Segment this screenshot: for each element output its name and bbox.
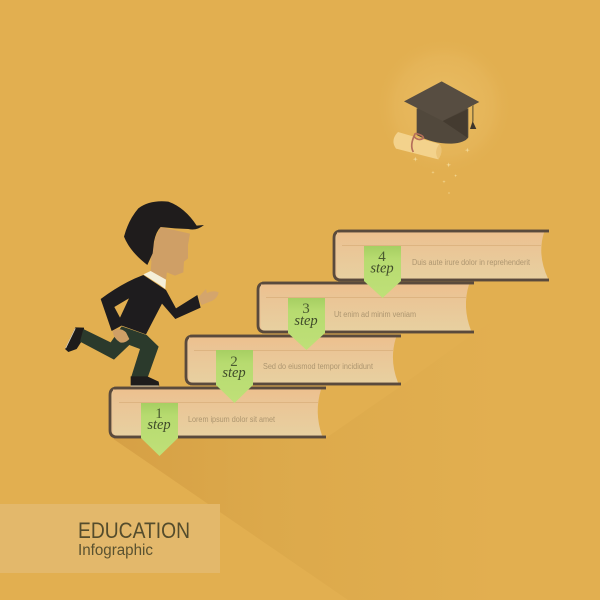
book step 4 <box>334 231 552 280</box>
icon: graduation cap and diploma <box>393 81 479 194</box>
long shadow of the book stairs <box>112 281 600 600</box>
cap body <box>417 108 468 144</box>
back shoe <box>65 327 84 352</box>
book step 2 <box>186 336 403 384</box>
book step 1 <box>110 388 328 437</box>
sparkles <box>413 148 470 194</box>
neck <box>151 258 168 280</box>
ribbon step 2: 2 <box>230 354 238 370</box>
trousers <box>80 326 159 377</box>
ribbon step 3 <box>288 298 325 350</box>
front hand <box>198 289 219 305</box>
ribbon step 2: step <box>222 365 246 381</box>
ribbon step 4: 4 <box>378 249 386 265</box>
diploma <box>393 132 441 159</box>
running student figure <box>65 201 219 386</box>
ribbon step 1: 1 <box>155 406 163 422</box>
hair <box>124 201 204 265</box>
book step 3 <box>258 283 476 332</box>
caption: Duis aute irure dolor in reprehenderit <box>412 258 531 267</box>
ribbon step 4: step <box>370 260 394 276</box>
diploma ribbon <box>412 133 423 152</box>
ribbon step 2 <box>216 350 253 403</box>
tassel <box>472 105 474 122</box>
caption: Lorem ipsum dolor sit amet <box>188 415 276 424</box>
ribbon step 3: 3 <box>302 301 310 317</box>
front shoe <box>131 376 159 386</box>
sweater <box>101 275 201 334</box>
ear <box>147 240 154 251</box>
hand on hip <box>113 329 129 343</box>
face <box>151 227 190 276</box>
ribbon step 1 <box>141 403 178 456</box>
collar <box>143 271 166 289</box>
subtitle: Infographic: Infographic <box>78 542 153 559</box>
caption: Ut enim ad minim veniam <box>334 310 416 319</box>
ribbon step 3: step <box>294 313 318 329</box>
title banner <box>0 504 220 573</box>
ribbon step 4 <box>364 246 401 298</box>
caption: Sed do eiusmod tempor incididunt <box>263 362 374 371</box>
title: EDUCATION: EDUCATION <box>78 518 190 543</box>
ribbon step 1: step <box>147 417 171 433</box>
mortarboard <box>404 81 479 121</box>
glow behind graduation cap <box>374 36 514 176</box>
